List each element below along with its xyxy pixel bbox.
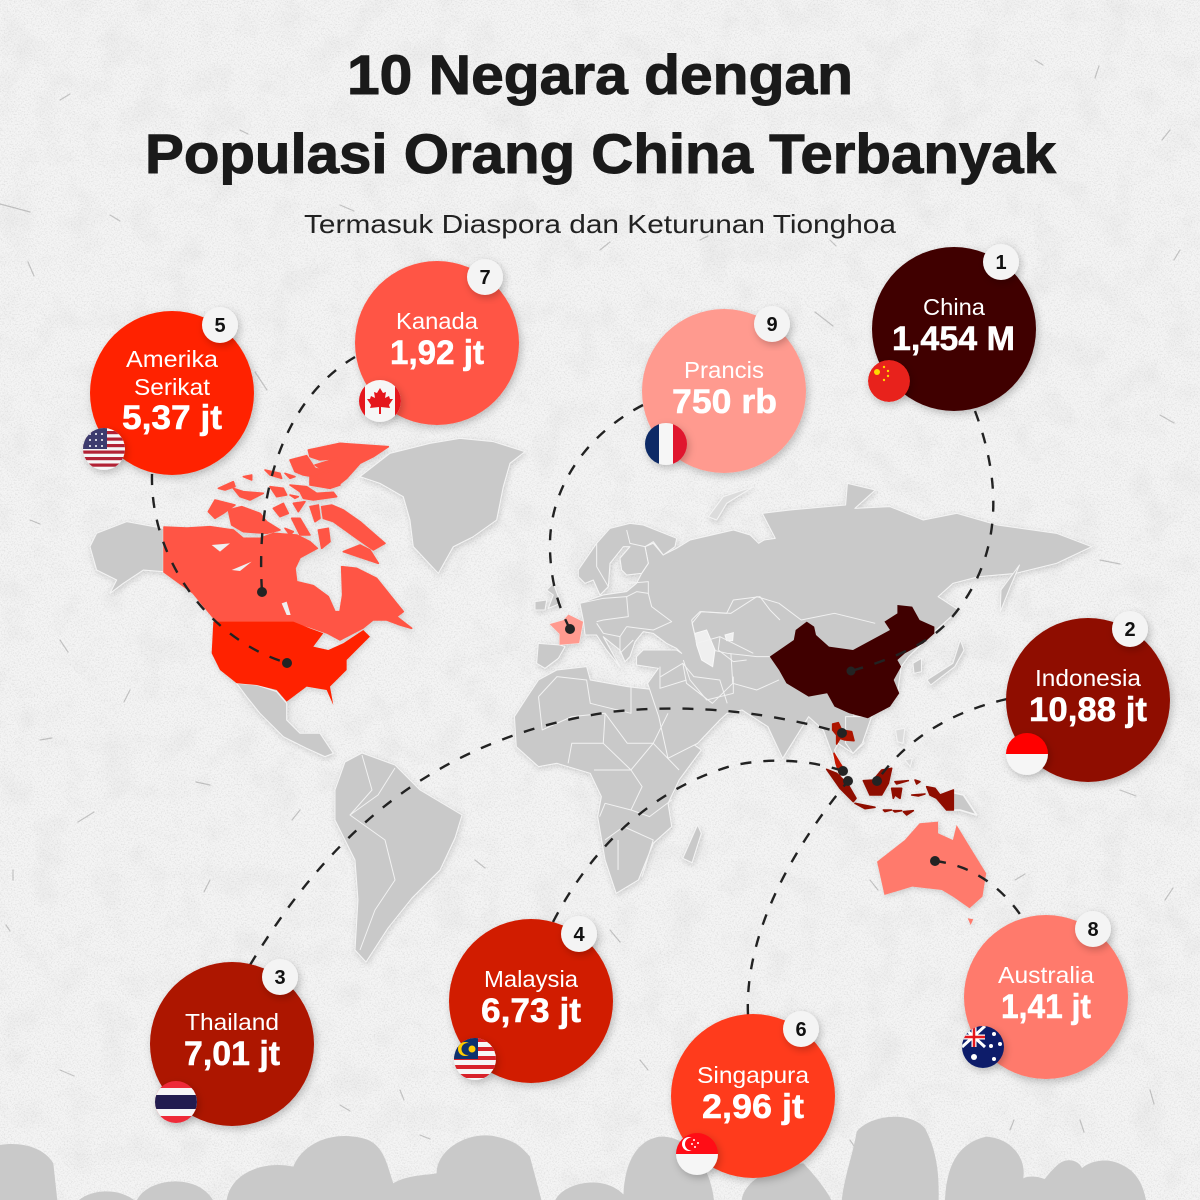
Africa [514, 667, 701, 893]
Britain [547, 583, 561, 608]
Kamchatka [1000, 565, 1020, 612]
flag: USA [83, 428, 125, 470]
title: Populasi Orang China Terbanyak [145, 122, 1057, 185]
Alaska [90, 522, 163, 593]
crowd right [555, 1117, 1047, 1200]
region: Europe [535, 487, 780, 700]
bubble 7: Kanada: 1,92 jt [390, 334, 484, 372]
region: Southeast Asia [827, 723, 977, 815]
Europe borders [580, 530, 780, 700]
bubble 3: Thailand: 7,01 jt [184, 1035, 280, 1073]
bubble 1: China [868, 244, 1036, 411]
bubble 1: China: China [923, 294, 985, 320]
subtitle: Termasuk Diaspora dan Keturunan Tionghoa [304, 209, 897, 239]
world map [90, 438, 1092, 962]
bubble 9: Prancis [642, 306, 806, 473]
bubble 9: Prancis: 750 rb [672, 383, 777, 421]
South America [335, 753, 462, 962]
flag: Thailand [155, 1081, 197, 1123]
bubble 8: Australia: 1,41 jt [1001, 988, 1091, 1026]
France [549, 614, 583, 645]
bubble 4: Malaysia: 4 [573, 924, 585, 946]
United States [212, 622, 370, 705]
bubble 1: China: 1 [995, 252, 1007, 274]
bubble 2: Indonesia [1006, 611, 1170, 782]
Asia borders [538, 597, 875, 877]
bubble 2: Indonesia: 2 [1124, 619, 1136, 641]
bubble 4: Malaysia: 6,73 jt [481, 992, 581, 1030]
flag: Malaysia [454, 1038, 496, 1080]
bubble 5: Amerika Serikat: 5 [214, 315, 226, 337]
flag: China [868, 360, 910, 402]
bubble 7: Kanada: Kanada [396, 308, 478, 334]
flag: Singapore [676, 1133, 718, 1175]
Japan [927, 640, 964, 685]
Canadian lakes [212, 543, 291, 615]
flag: France [645, 423, 687, 465]
Indonesia [827, 768, 953, 815]
bubble 8: Australia: 8 [1087, 919, 1099, 941]
crowd far right [1040, 1160, 1146, 1200]
crowd left [0, 1135, 542, 1200]
Mexico and Central America [237, 683, 333, 757]
bubble 2: Indonesia: 10,88 jt [1029, 691, 1147, 729]
Malaysia [834, 753, 846, 775]
bubble 2: Indonesia: Indonesia [1035, 665, 1141, 691]
title [145, 43, 1057, 185]
region: North America [90, 438, 525, 757]
bubble 5: Amerika Serikat [83, 307, 254, 475]
bubble 5: Amerika Serikat: Serikat [134, 374, 211, 400]
bubble 7: Kanada: 7 [479, 267, 491, 289]
bubble 4: Malaysia [449, 916, 613, 1083]
flag: Indonesia [1006, 733, 1048, 775]
Eurasia [580, 483, 1092, 780]
bubble 8: Australia [962, 911, 1128, 1079]
region: Eurasia Africa Oceania [514, 483, 1092, 925]
bubble 4: Malaysia: Malaysia [484, 966, 578, 992]
flag: Canada [359, 380, 401, 422]
bubble 6: Singapura [671, 1011, 835, 1178]
bubble 8: Australia: Australia [998, 962, 1094, 988]
Greenland [360, 438, 525, 573]
bubble 5: Amerika Serikat: Amerika [126, 346, 218, 372]
Indochina [846, 717, 872, 753]
Canada [164, 443, 412, 640]
title: 10 Negara dengan [347, 43, 853, 106]
Scandinavia [578, 523, 677, 595]
bubble 6: Singapura: 6 [795, 1019, 807, 1041]
bubble 9: Prancis: Prancis [684, 357, 764, 383]
Spain [537, 643, 565, 668]
bubble 3: Thailand: Thailand [185, 1009, 279, 1035]
bubble 3: Thailand [150, 959, 314, 1126]
crowd silhouette [0, 1117, 1146, 1200]
bubble 6: Singapura: Singapura [697, 1062, 809, 1088]
bubble 6: Singapura: 2,96 jt [702, 1088, 804, 1126]
flag: Australia [962, 1026, 1004, 1068]
connector lines and map dots [152, 357, 1022, 1015]
bubble 9: Prancis: 9 [766, 314, 778, 336]
China [770, 605, 934, 718]
Thailand [833, 723, 854, 744]
Papua New Guinea [953, 793, 977, 815]
bubble 1: China: 1,454 M [892, 320, 1015, 358]
Philippines [896, 728, 905, 743]
Caspian and Aral seas [695, 630, 715, 667]
bubble 5: Amerika Serikat: 5,37 jt [122, 399, 222, 437]
bubble 3: Thailand: 3 [274, 967, 286, 989]
Novaya Zemlya [708, 487, 753, 520]
Madagascar [683, 825, 701, 863]
bubble 7: Kanada [355, 259, 519, 425]
Australia [877, 822, 986, 925]
